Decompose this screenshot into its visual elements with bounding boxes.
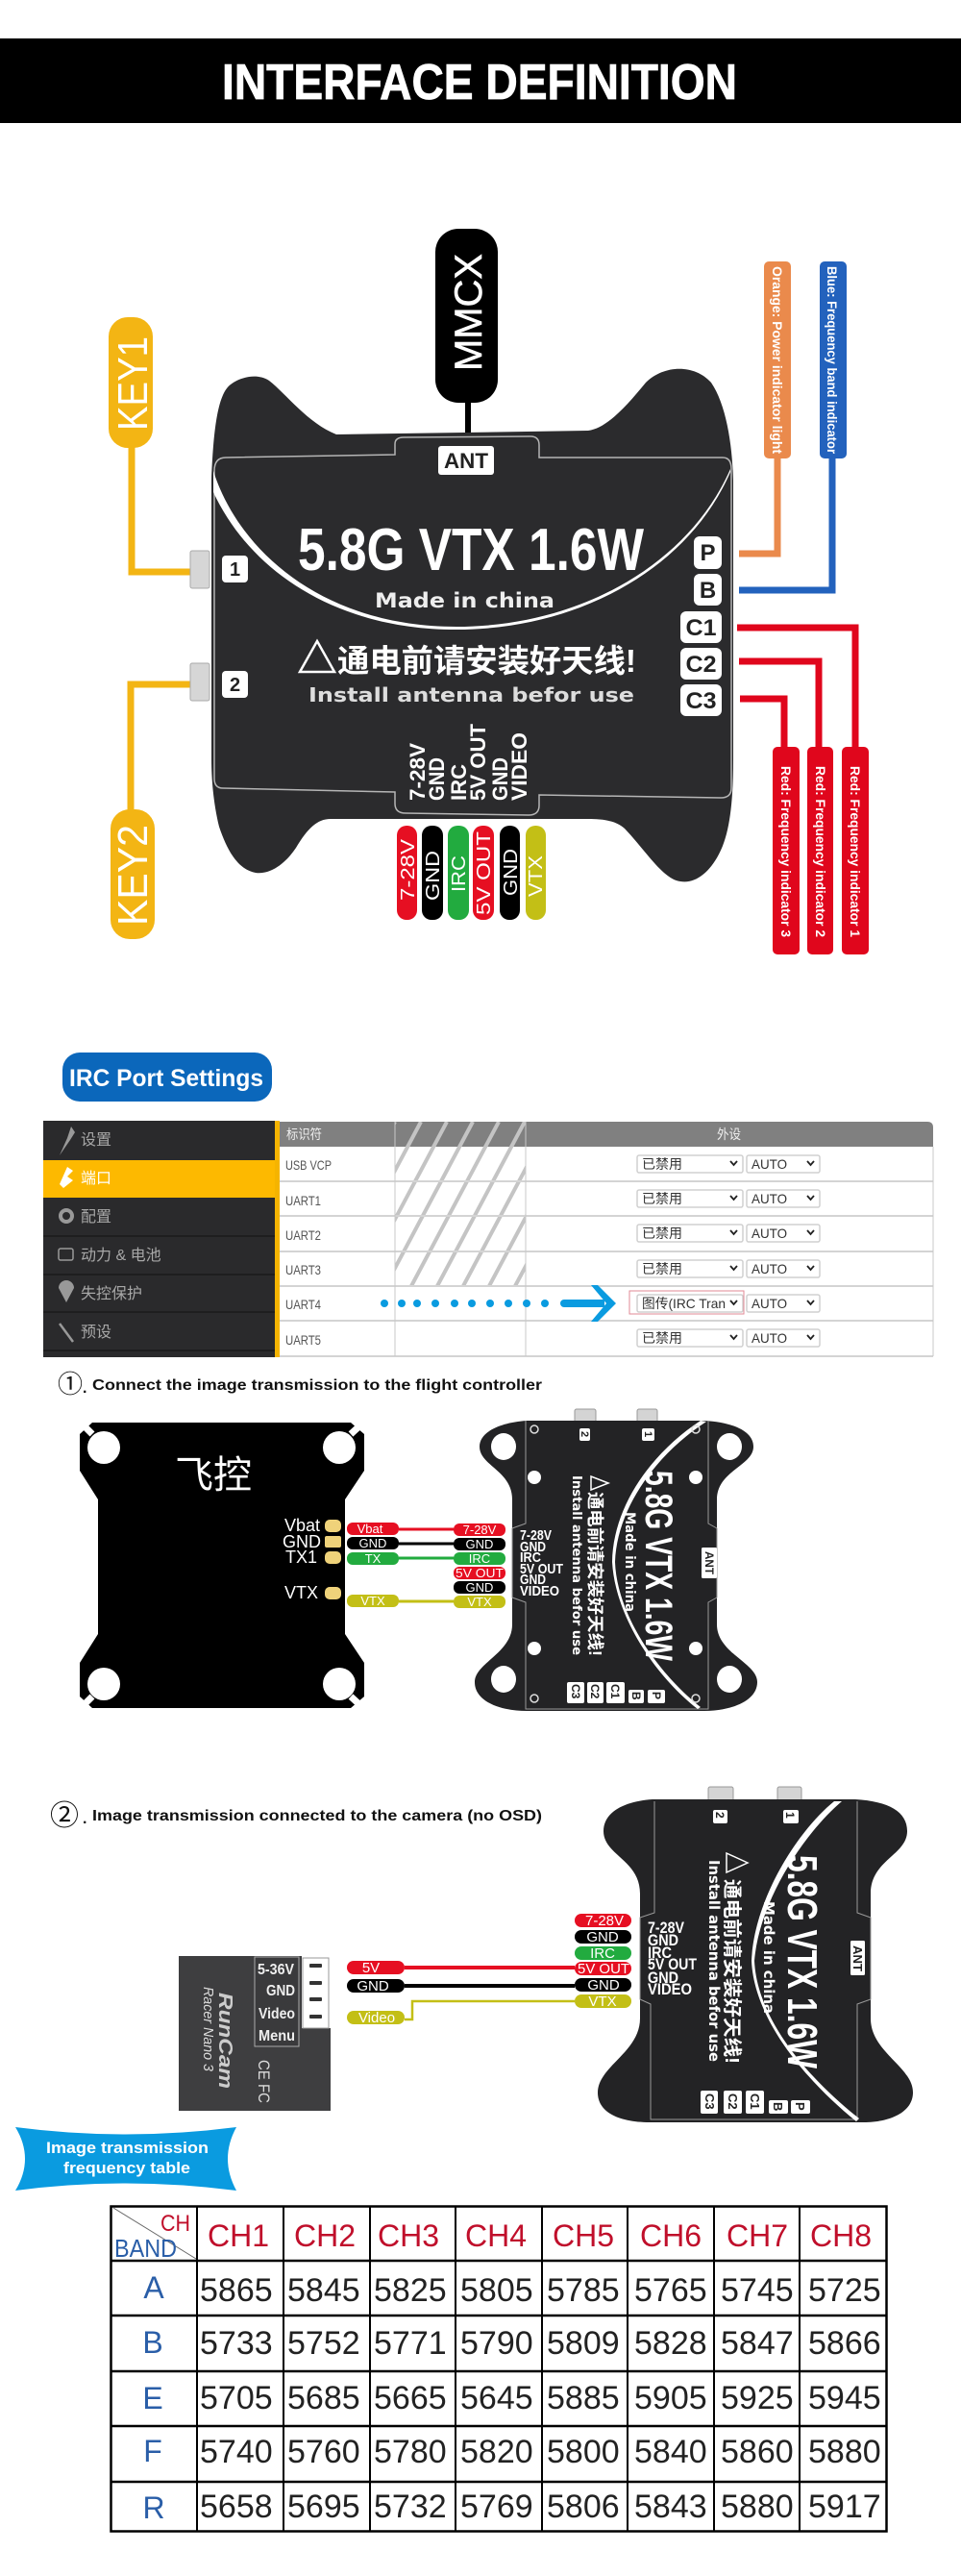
- key tag 2: [222, 671, 248, 698]
- VTX board, rotated, step 2: P: [793, 2102, 807, 2111]
- wiring: flight controller to VTX: TX: [365, 1551, 382, 1566]
- VTX board, rotated, step 2: C1: [748, 2093, 762, 2110]
- frequency values: 5840: [634, 2434, 707, 2470]
- VTX board, rotated, step 1: 5.8G VTX 1.6W: [637, 1471, 679, 1661]
- VTX board, rotated, step 2: [598, 1787, 913, 2122]
- frequency values: 5790: [460, 2325, 533, 2362]
- pin names: GND: [425, 757, 449, 801]
- step 2 caption: .: [83, 1811, 86, 1827]
- frequency values: 5845: [287, 2272, 360, 2309]
- frequency values: 5865: [200, 2272, 273, 2309]
- panel outline: [214, 436, 731, 815]
- blue frequency band indicator label: Blue: Frequency band indicator: [825, 266, 840, 455]
- warning text: 通电前请安装好天线!: [337, 643, 636, 679]
- panel: VTX board top diagram: [109, 229, 869, 954]
- key tag 1: [222, 556, 248, 582]
- camera module: Racer Nano 3: [200, 1987, 216, 2072]
- VTX board, rotated, step 2: Made in china: [760, 1901, 777, 2014]
- color coded pin pills: 7-28V: [398, 838, 419, 901]
- channel headers: CH4: [465, 2218, 527, 2253]
- ports table: AUTO: [752, 1296, 787, 1311]
- ports table: 标识符: [286, 1127, 322, 1142]
- blue frequency band indicator label: [739, 261, 847, 590]
- frequency values: 5733: [200, 2325, 273, 2362]
- frequency values: 5765: [634, 2272, 707, 2309]
- pad labels: VTX: [284, 1583, 318, 1602]
- ports table: 已禁用: [642, 1156, 682, 1172]
- hatched column: [396, 1122, 525, 1285]
- ports table: UART1: [285, 1193, 321, 1208]
- LED tag C1: [680, 611, 722, 643]
- VTX board, rotated, step 2: GND: [648, 1969, 678, 1987]
- ports table: AUTO: [752, 1156, 787, 1172]
- camera module: [179, 1956, 331, 2111]
- LED tag B: B: [700, 578, 716, 604]
- frequency values: 5745: [721, 2272, 794, 2309]
- VTX board, rotated, step 2: 1: [783, 1812, 797, 1819]
- frequency values: 5725: [808, 2272, 881, 2309]
- panel: port settings screenshot: [43, 1121, 933, 1357]
- VTX board, rotated, step 2: C2: [726, 2093, 740, 2110]
- VTX board, rotated, step 2: B: [771, 2102, 785, 2111]
- camera module: Menu: [259, 2028, 295, 2044]
- red frequency indicator 2 label: [739, 661, 833, 954]
- ports table: 外设: [717, 1127, 741, 1142]
- ports table: [280, 1122, 933, 1356]
- wiring: flight controller to VTX: 5V OUT: [456, 1566, 504, 1580]
- frequency table: [111, 2206, 887, 2532]
- VTX board, rotated, step 2: Install antenna befor use: [705, 1860, 723, 2062]
- channel headers: [208, 2218, 872, 2253]
- wiring: flight controller to VTX: IRC: [469, 1551, 490, 1566]
- channel headers: CH2: [294, 2218, 356, 2253]
- table corner labels: [114, 2211, 190, 2263]
- color coded pin pills: IRC: [449, 855, 470, 892]
- VTX board, rotated, step 1: [475, 1409, 757, 1711]
- frequency values: 5905: [634, 2380, 707, 2416]
- LED tag P: [694, 536, 722, 569]
- wiring: flight controller to VTX: VTX: [467, 1595, 492, 1609]
- frequency values: 5885: [547, 2380, 620, 2416]
- white curved line: [213, 469, 730, 630]
- ribbon heading: frequency table: Image transmission: [46, 2139, 209, 2157]
- wiring: camera to VTX: [347, 1913, 631, 2026]
- VTX board, rotated, step 2: 7-28V: [648, 1919, 685, 1937]
- ports table: 已禁用: [642, 1330, 682, 1346]
- VTX board, rotated, step 2: C3: [702, 2093, 717, 2110]
- ports table: UART4: [285, 1297, 321, 1312]
- camera module: 5-36V: [258, 1962, 294, 1978]
- ribbon heading: frequency table: [15, 2127, 236, 2191]
- VTX board, rotated, step 1: P: [650, 1692, 663, 1699]
- VTX board, rotated, step 2: 5.8G VTX 1.6W: [778, 1855, 825, 2068]
- pad labels: GND: [283, 1532, 321, 1551]
- step 2 caption: Image transmission connected to the camera (no OSD): [92, 1808, 542, 1824]
- wiring: camera to VTX: GND: [587, 1977, 620, 1994]
- VTX board, rotated, step 1: B: [629, 1692, 643, 1700]
- VTX board, rotated, step 2: ANT: [850, 1945, 865, 1971]
- frequency values: 5860: [721, 2434, 794, 2470]
- band letters: R: [142, 2490, 165, 2525]
- flight controller board: [80, 1423, 364, 1708]
- blue dotted arrow: [381, 1285, 616, 1322]
- frequency values: 5806: [547, 2489, 620, 2525]
- VTX board, rotated, step 2: 5V OUT: [648, 1955, 698, 1973]
- table corner labels: CH: [160, 2211, 190, 2237]
- frequency values: 5866: [808, 2325, 881, 2362]
- band letters: F: [143, 2434, 162, 2468]
- VTX board, rotated, step 1: 1: [642, 1431, 653, 1437]
- step 2 caption: ②: [50, 1800, 79, 1832]
- VTX board, rotated, step 2: 2: [713, 1812, 727, 1819]
- band letters: B: [142, 2325, 163, 2360]
- sidebar menu: 预设: [81, 1324, 111, 1341]
- sidebar menu: 失控保护: [81, 1285, 142, 1302]
- frequency values: 5925: [721, 2380, 794, 2416]
- red frequency indicator 2 label: Red: Frequency indicator 2: [813, 766, 828, 937]
- key tag 2: 2: [230, 675, 240, 696]
- VTX board, rotated, step 1: 通电前请安装好天线!: [585, 1492, 604, 1656]
- frequency values: 5658: [200, 2489, 273, 2525]
- VTX board, rotated, step 1: Install antenna befor use: [569, 1475, 583, 1655]
- ports table: UART2: [285, 1227, 321, 1243]
- ports table: AUTO: [752, 1226, 787, 1241]
- VTX board, rotated, step 1: Made in china: [622, 1512, 637, 1612]
- LED tag C3: C3: [686, 688, 717, 714]
- sidebar menu: 配置: [81, 1208, 111, 1226]
- step 1 caption: [58, 1370, 542, 1399]
- frequency values: 5843: [634, 2489, 707, 2525]
- table corner labels: BAND: [114, 2234, 177, 2263]
- wiring: camera to VTX: 7-28V: [585, 1913, 624, 1929]
- red frequency indicator 3 label: [740, 699, 800, 954]
- orange power indicator label: [739, 261, 791, 554]
- frequency values: 5805: [460, 2272, 533, 2309]
- step 1 caption: ①: [58, 1370, 83, 1399]
- frequency values: 5740: [200, 2434, 273, 2470]
- ANT tag: ANT: [444, 449, 489, 473]
- red frequency indicator 1 label: Red: Frequency indicator 1: [848, 766, 863, 937]
- sidebar menu: 端口: [81, 1170, 111, 1187]
- band letters: A: [143, 2270, 164, 2305]
- ports table: AUTO: [752, 1261, 787, 1276]
- VTX board, rotated, step 1: GND: [520, 1539, 546, 1555]
- camera module: CE FC: [255, 2060, 273, 2103]
- pad labels: [283, 1516, 321, 1602]
- ports table: AUTO: [752, 1330, 787, 1346]
- ports table: USB VCP: [285, 1157, 332, 1173]
- frequency values: 5771: [374, 2325, 447, 2362]
- install note: Install antenna befor use: [308, 683, 634, 706]
- peripheral dropdowns: [637, 1155, 820, 1347]
- ports table: 已禁用: [642, 1226, 682, 1241]
- pad labels: TX1: [285, 1548, 317, 1567]
- frequency values: 5880: [721, 2489, 794, 2525]
- ribbon heading: frequency table: frequency table: [63, 2159, 190, 2177]
- channel headers: CH5: [553, 2218, 614, 2253]
- sidebar menu: 动力 & 电池: [81, 1247, 161, 1264]
- frequency values: 5732: [374, 2489, 447, 2525]
- wiring: flight controller to VTX: GND: [359, 1536, 386, 1550]
- ports table: 已禁用: [642, 1191, 682, 1206]
- VTX board, rotated, step 2: IRC: [648, 1944, 672, 1962]
- wiring: flight controller to VTX: GND: [466, 1537, 493, 1551]
- step 1 caption: Connect the image transmission to the flight controller: [92, 1377, 542, 1394]
- sidebar menu: 设置: [81, 1131, 111, 1149]
- pin names: GND: [488, 757, 512, 801]
- channel headers: CH1: [208, 2218, 269, 2253]
- LED tag C2: [680, 648, 722, 680]
- camera module: RunCam: [214, 1993, 235, 2089]
- pin names: [406, 723, 531, 801]
- LED tag P: P: [700, 540, 716, 566]
- VTX board, rotated, step 1: C3: [569, 1684, 582, 1699]
- VTX board, rotated, step 1: 5V OUT: [520, 1561, 563, 1577]
- connector lines and label pills: [109, 229, 869, 954]
- color coded pin pills: GND: [423, 851, 444, 901]
- wiring: flight controller to VTX: VTX: [360, 1594, 385, 1608]
- pin names: 7-28V: [406, 743, 430, 801]
- VTX board, rotated, step 2: GND: [648, 1931, 678, 1949]
- LED tag C2: C2: [686, 652, 717, 678]
- frequency values: 5825: [374, 2272, 447, 2309]
- title banner: [0, 38, 961, 123]
- frequency values: 5820: [460, 2434, 533, 2470]
- wiring: flight controller to VTX: [347, 1522, 505, 1609]
- KEY1 label: [109, 317, 190, 572]
- VTX board, rotated, step 1: C2: [588, 1684, 602, 1699]
- wiring: camera to VTX: 5V: [362, 1960, 380, 1976]
- VTX board, rotated, step 1: 7-28V: [520, 1527, 552, 1544]
- orange power indicator label: Orange: Power indicator light: [770, 266, 785, 454]
- color coded pin pills: GND: [501, 849, 522, 896]
- frequency values: 5785: [547, 2272, 620, 2309]
- LED tag B: [694, 574, 722, 606]
- key tag 1: 1: [230, 559, 240, 581]
- frequency values: 5752: [287, 2325, 360, 2362]
- frequency values: 5880: [808, 2434, 881, 2470]
- ANT tag: [438, 446, 494, 475]
- made in china: Made in china: [375, 589, 554, 612]
- channel headers: CH7: [727, 2218, 788, 2253]
- VTX board, rotated, step 1: IRC: [520, 1549, 541, 1566]
- frequency values: 5917: [808, 2489, 881, 2525]
- ports table: AUTO: [752, 1191, 787, 1206]
- pin names: IRC: [447, 764, 471, 801]
- frequency values: 5847: [721, 2325, 794, 2362]
- KEY2 label: [110, 684, 190, 939]
- KEY2 label: KEY2: [110, 825, 157, 926]
- LED tag C1: C1: [686, 615, 717, 641]
- flight controller name: 飞控: [175, 1454, 252, 1497]
- VTX board, rotated, step 1: VIDEO: [520, 1583, 559, 1599]
- frequency values: [200, 2272, 881, 2525]
- channel headers: CH3: [378, 2218, 439, 2253]
- frequency values: 5780: [374, 2434, 447, 2470]
- pin names: VIDEO: [507, 732, 531, 801]
- step 1 caption: .: [83, 1380, 86, 1397]
- frequency values: 5685: [287, 2380, 360, 2416]
- frequency values: 5705: [200, 2380, 273, 2416]
- camera module: Video: [259, 2006, 295, 2022]
- wiring: camera to VTX: GND: [357, 1978, 389, 1994]
- frequency values: 5828: [634, 2325, 707, 2362]
- ports table: UART3: [285, 1262, 321, 1277]
- band letters: [142, 2270, 165, 2525]
- solder pads: [325, 1520, 341, 1599]
- title banner: INTERFACE DEFINITION: [222, 55, 737, 111]
- frequency values: 5645: [460, 2380, 533, 2416]
- wiring: camera to VTX: Video: [358, 2010, 395, 2026]
- frequency values: 5945: [808, 2380, 881, 2416]
- pin names: 5V OUT: [466, 723, 490, 801]
- color coded pin pills: VTX: [526, 855, 547, 897]
- VTX board, rotated, step 1: GND: [520, 1572, 546, 1588]
- wiring: camera to VTX: 5V OUT: [578, 1961, 629, 1977]
- MMCX antenna label: [435, 229, 498, 437]
- wiring: flight controller to VTX: 7-28V: [463, 1523, 497, 1537]
- band letters: E: [142, 2381, 163, 2415]
- VTX board, rotated, step 1: ANT: [702, 1551, 716, 1575]
- frequency values: 5665: [374, 2380, 447, 2416]
- KEY1 label: KEY1: [110, 336, 157, 431]
- wiring: camera to VTX: IRC: [590, 1945, 615, 1962]
- frequency values: 5809: [547, 2325, 620, 2362]
- VTX board, rotated, step 1: C1: [608, 1684, 622, 1699]
- frequency values: 5800: [547, 2434, 620, 2470]
- LED tag C3: [680, 684, 722, 716]
- wiring: camera to VTX: GND: [586, 1929, 619, 1945]
- frequency values: 5760: [287, 2434, 360, 2470]
- heading: IRC Port Settings: [62, 1053, 272, 1102]
- channel headers: CH8: [810, 2218, 872, 2253]
- MMCX antenna label: MMCX: [448, 254, 490, 371]
- wiring: camera to VTX: VTX: [588, 1994, 617, 2010]
- ports table: 图传(IRC Tran: [642, 1296, 726, 1311]
- heading: IRC Port Settings: IRC Port Settings: [69, 1065, 263, 1092]
- red frequency indicator 1 label: [737, 628, 869, 954]
- warning triangle: [300, 641, 334, 672]
- VTX board: [211, 369, 733, 881]
- color coded pin pills: 5V OUT: [474, 831, 495, 915]
- product name: 5.8G VTX 1.6W: [298, 517, 644, 583]
- VTX board, rotated, step 1: 2: [579, 1431, 590, 1437]
- frequency values: 5769: [460, 2489, 533, 2525]
- step 2 caption: [50, 1800, 542, 1832]
- frequency values: 5695: [287, 2489, 360, 2525]
- pad labels: Vbat: [284, 1516, 320, 1535]
- wiring: flight controller to VTX: GND: [466, 1580, 493, 1595]
- sidebar menu: [43, 1121, 280, 1357]
- channel headers: CH6: [640, 2218, 702, 2253]
- wiring: flight controller to VTX: Vbat: [357, 1522, 383, 1536]
- red frequency indicator 3 label: Red: Frequency indicator 3: [778, 766, 794, 937]
- VTX board, rotated, step 2: 通电前请安装好天线!: [721, 1879, 743, 2064]
- ports table: UART5: [285, 1332, 321, 1348]
- VTX board, rotated, step 2: VIDEO: [648, 1980, 692, 1998]
- camera module: GND: [266, 1983, 295, 1999]
- side buttons: [190, 551, 209, 701]
- color coded pin pills: [397, 826, 547, 920]
- ports table: 已禁用: [642, 1261, 682, 1276]
